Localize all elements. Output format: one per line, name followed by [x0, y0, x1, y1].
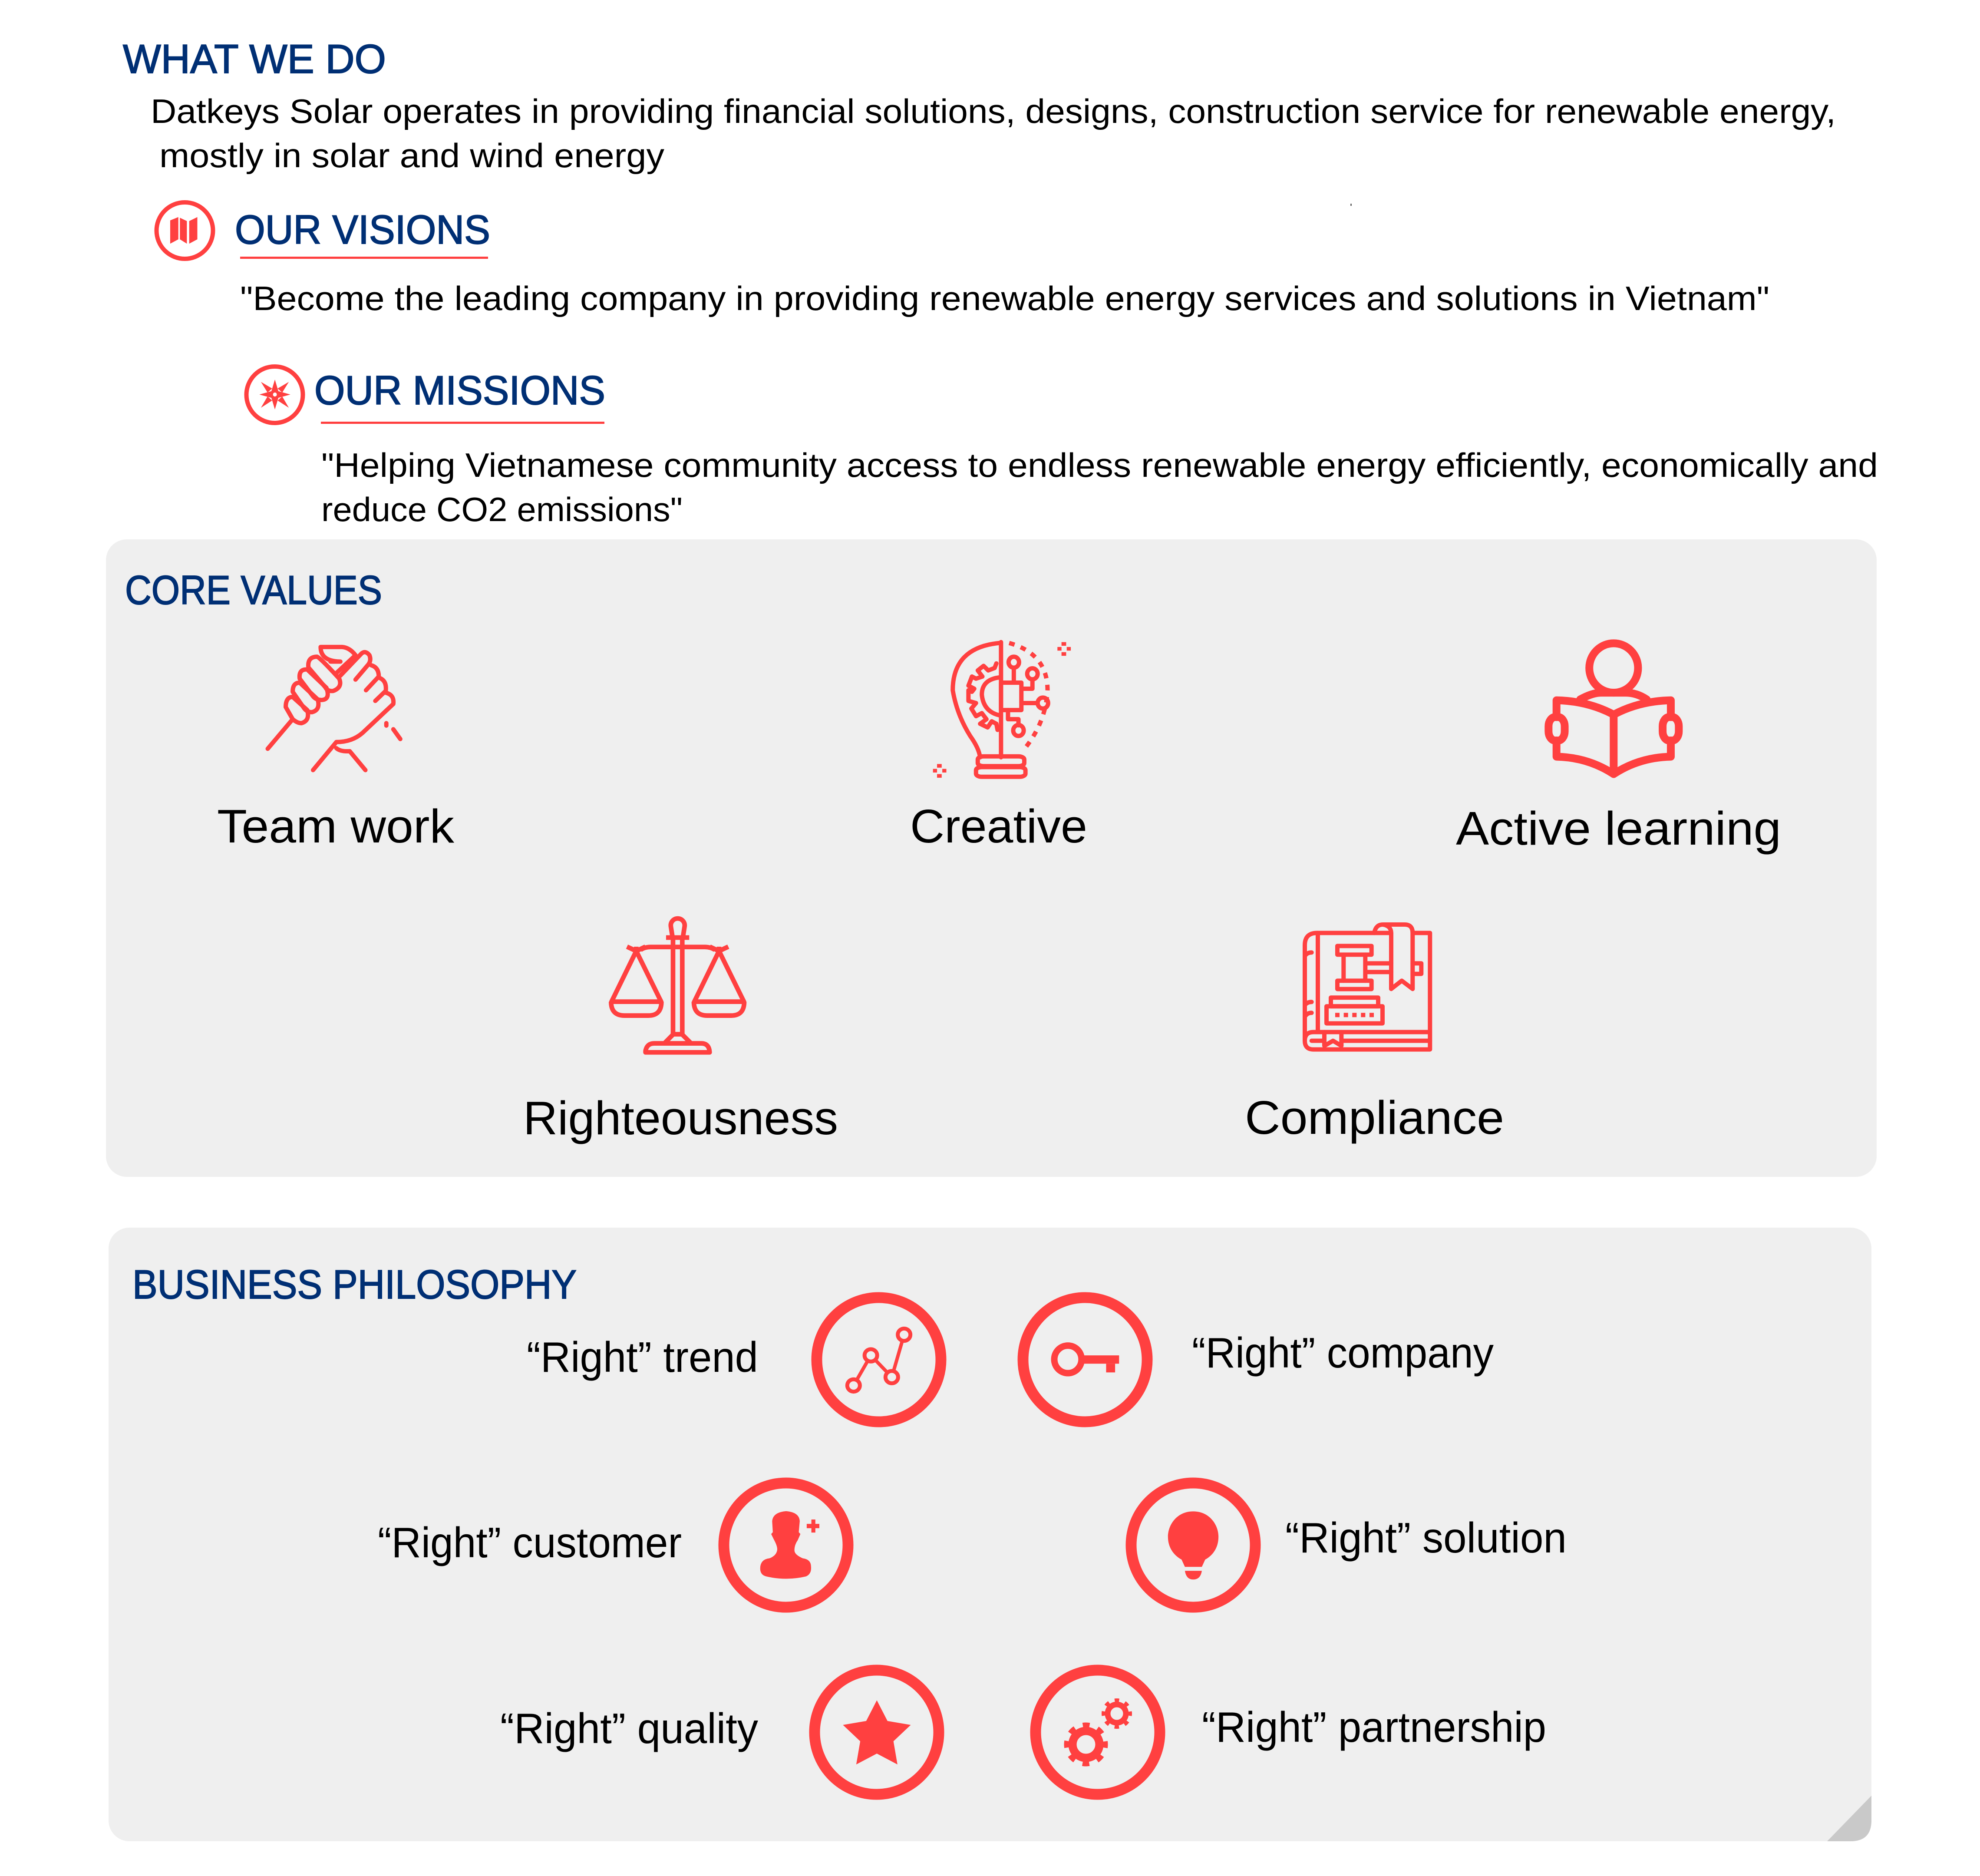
label: right partnership: “Right” partnership	[1202, 1703, 1546, 1751]
text block: mission statement: "Helping Vietnamese community access to endless renewable energy efficiently, economically and	[321, 446, 1878, 484]
text block: vision statement: "Become the leading company in providing renewable energy services and solutions in Vietnam"	[240, 279, 1769, 317]
label: active learning: Active learning	[1456, 802, 1781, 855]
tiny mark	[1350, 204, 1352, 206]
text block: what we do description: mostly in solar and wind energy	[159, 136, 664, 175]
icon: active learning reader	[1548, 643, 1679, 774]
text block: what we do description: Datkeys Solar operates in providing financial solutions, designs, construction service for renewable energy,	[151, 92, 1836, 130]
heading: what we do: WHAT WE DO	[123, 36, 386, 82]
icon: compass in circle	[247, 367, 303, 423]
icon: star in circle	[815, 1670, 939, 1794]
icon: key in circle	[1023, 1298, 1147, 1422]
text block: mission statement: reduce CO2 emissions"	[321, 490, 683, 528]
label: right quality: “Right” quality	[500, 1704, 758, 1752]
page fold corner	[1827, 1796, 1871, 1841]
label: right solution: “Right” solution	[1285, 1514, 1567, 1562]
panel: core values	[106, 539, 1877, 1177]
icon: light bulb in circle	[1131, 1483, 1255, 1607]
icon: customer in circle	[724, 1483, 848, 1607]
icon: righteousness scales	[611, 918, 744, 1052]
label: right customer: “Right” customer	[378, 1519, 682, 1566]
icon: gears in circle	[1036, 1670, 1160, 1794]
icon: team work handshake	[268, 647, 400, 770]
heading: our missions: OUR MISSIONS	[314, 367, 605, 413]
icon: compliance law book	[1305, 925, 1430, 1050]
label: compliance: Compliance	[1245, 1091, 1504, 1144]
label: right company: “Right” company	[1192, 1329, 1494, 1377]
icon: creative light bulb	[933, 642, 1071, 778]
label: team work: Team work	[217, 800, 455, 853]
label: creative: Creative	[910, 800, 1087, 853]
label: righteousness: Righteousness	[523, 1092, 838, 1145]
heading: our visions: OUR VISIONS	[235, 207, 490, 252]
text block: what we do description	[151, 92, 1836, 175]
heading: business philosophy: BUSINESS PHILOSOPHY	[132, 1262, 577, 1307]
icon: trend chart in circle	[817, 1298, 941, 1422]
label: right trend: “Right” trend	[527, 1333, 758, 1381]
panel: business philosophy	[109, 1228, 1871, 1841]
text block: mission statement	[321, 446, 1878, 528]
icon: map in circle	[156, 202, 213, 259]
heading: core values: CORE VALUES	[125, 567, 382, 613]
